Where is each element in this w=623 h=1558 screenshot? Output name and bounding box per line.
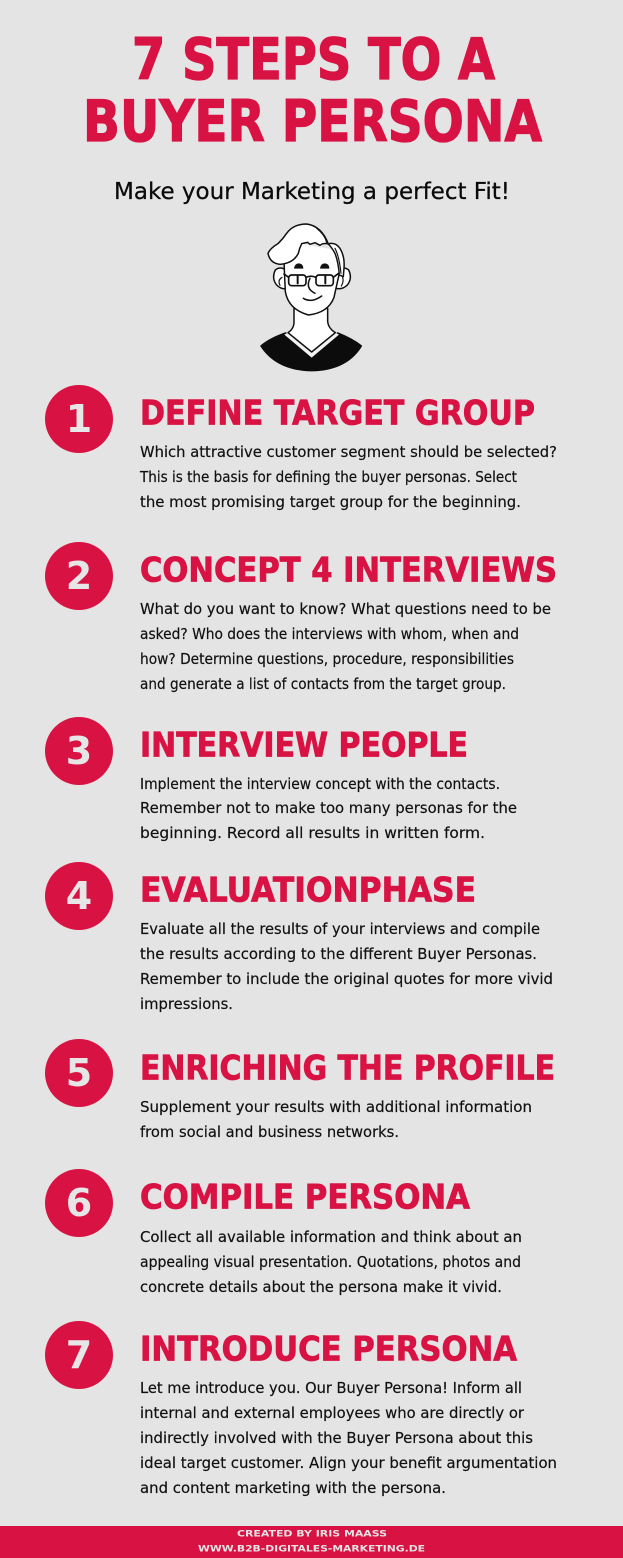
text: step 6: appealing visual presentation. Quotations, photos and [140, 1253, 521, 1271]
text: step 2: asked? Who does the interviews with whom, when and [140, 625, 519, 643]
number badge 4: 4 [66, 874, 92, 918]
heading: step 2: CONCEPT 4 INTERVIEWS [140, 550, 557, 590]
text: step 7: and content marketing with the persona. [140, 1479, 446, 1497]
text: step 3: Implement the interview concept with the contacts. [140, 775, 500, 793]
text: step 4: impressions. [140, 995, 233, 1013]
footer band: WWW.B2B-DIGITALES-MARKETING.DE [198, 1544, 425, 1554]
text: step 2: What do you want to know? What questions need to be [140, 600, 551, 618]
text: step 7: internal and external employees who are directly or [140, 1404, 525, 1422]
text: step 6: Collect all available information and think about an [140, 1228, 522, 1246]
number badge 3 [45, 717, 113, 785]
number badge 7: 7 [66, 1333, 92, 1377]
number badge 1: 1 [66, 397, 92, 441]
number badge 7 [45, 1321, 113, 1389]
panel: step 4 [45, 862, 553, 1013]
footer band: CREATED BY IRIS MAASS [237, 1530, 387, 1540]
heading: step 6: COMPILE PERSONA [140, 1178, 471, 1218]
title: 7 STEPS TO A [132, 27, 495, 93]
text: step 7: indirectly involved with the Buyer Persona about this [140, 1429, 533, 1447]
icon: persona portrait [261, 224, 361, 371]
text: step 1: the most promising target group for the beginning. [140, 493, 521, 511]
text: step 1: Which attractive customer segment should be selected? [140, 443, 557, 461]
text: step 6: concrete details about the persona make it vivid. [140, 1278, 502, 1296]
heading: step 5: ENRICHING THE PROFILE [140, 1048, 555, 1088]
number badge 6: 6 [66, 1181, 92, 1225]
number badge 6 [45, 1169, 113, 1237]
text: step 4: Evaluate all the results of your interviews and compile [140, 920, 540, 938]
title [83, 27, 542, 155]
text: step 2: how? Determine questions, procedure, responsibilities [140, 650, 514, 668]
text: step 7 [140, 1379, 557, 1497]
text: step 6 [140, 1228, 522, 1296]
panel: step 7 [45, 1321, 557, 1497]
title: BUYER PERSONA [83, 89, 542, 155]
text: step 4: the results according to the different Buyer Personas. [140, 945, 537, 963]
number badge 2: 2 [66, 554, 92, 598]
text: step 4 [140, 920, 553, 1013]
footer band [0, 1526, 623, 1558]
heading: step 7: INTRODUCE PERSONA [140, 1330, 518, 1370]
number badge 2 [45, 542, 113, 610]
number badge 5: 5 [66, 1051, 92, 1095]
panel: step 1 [45, 385, 557, 511]
text: step 7: ideal target customer. Align your benefit argumentation [140, 1454, 557, 1472]
panel: step 5 [45, 1039, 555, 1141]
text: step 5: from social and business networks. [140, 1123, 399, 1141]
text: step 5: Supplement your results with additional information [140, 1098, 532, 1116]
panel: step 2 [45, 542, 557, 693]
panel: step 6 [45, 1169, 522, 1296]
heading: step 1: DEFINE TARGET GROUP [140, 394, 535, 434]
number badge 3: 3 [66, 729, 92, 773]
heading: step 4: EVALUATIONPHASE [140, 870, 476, 910]
panel: step 3 [45, 717, 517, 842]
text: step 2: and generate a list of contacts from the target group. [140, 675, 506, 693]
number badge 1 [45, 385, 113, 453]
text: step 3 [140, 775, 517, 842]
text: step 3: beginning. Record all results in written form. [140, 824, 485, 842]
heading: step 3: INTERVIEW PEOPLE [140, 726, 468, 766]
text: step 3: Remember not to make too many personas for the [140, 799, 517, 817]
number badge 4 [45, 862, 113, 930]
number badge 5 [45, 1039, 113, 1107]
subtitle: Make your Marketing a perfect Fit! [114, 179, 510, 205]
text: step 1 [139, 443, 557, 511]
text: step 7: Let me introduce you. Our Buyer Persona! Inform all [140, 1379, 522, 1397]
text: step 4: Remember to include the original quotes for more vivid [140, 970, 553, 988]
text: step 2 [140, 600, 551, 693]
text: step 5 [140, 1098, 532, 1141]
text: step 1: This is the basis for defining the buyer personas. Select [139, 468, 517, 486]
